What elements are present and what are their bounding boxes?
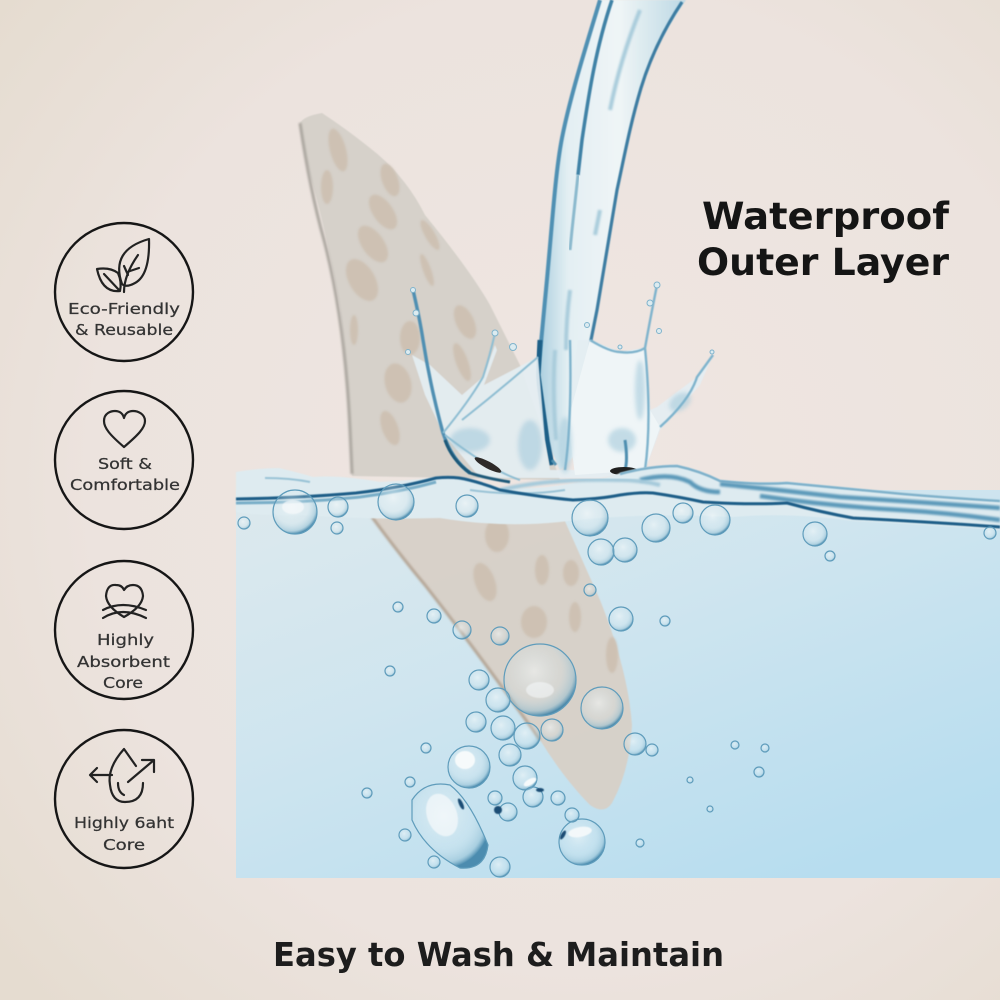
feature badge: Highly Absorbent Core: Absorbent <box>77 653 170 671</box>
bubble highlights <box>282 500 593 841</box>
heading: Waterproof Outer Layer: Outer Layer <box>697 241 950 284</box>
feature badge: Highly Bait Core <box>55 730 193 868</box>
bubble dark accents <box>457 788 567 840</box>
icon: absorbent heart <box>103 585 146 618</box>
pad print spots <box>321 127 618 673</box>
feature badge: Highly Absorbent Core: Core <box>103 674 143 692</box>
heading: Waterproof Outer Layer <box>697 195 950 284</box>
pouring water stream <box>538 0 686 470</box>
feature badge: Highly Bait Core: Core <box>103 836 145 854</box>
feature badge: Soft & Comfortable <box>55 391 193 529</box>
heading: Waterproof Outer Layer: Waterproof <box>702 195 950 238</box>
label: Highly <box>97 631 154 649</box>
water tank <box>236 490 1000 878</box>
feature badge: Soft & Comfortable: Comfortable <box>70 476 180 494</box>
feature badge: Eco-Friendly & Reusable: & Reusable <box>75 321 173 339</box>
splash shading <box>450 360 694 473</box>
footer caption: Easy to Wash & Maintain <box>273 935 724 974</box>
feature badge: Highly Absorbent Core <box>55 561 193 699</box>
label: Highly 6aht <box>74 814 174 832</box>
air bubbles <box>238 484 996 877</box>
icon: droplet with arrows <box>90 749 154 802</box>
splash crown <box>406 282 714 482</box>
label: Eco-Friendly <box>68 300 180 318</box>
icon: heart <box>104 411 145 447</box>
label: Soft & <box>98 455 152 473</box>
splash droplets <box>406 282 714 354</box>
icon: leaves <box>97 239 149 292</box>
diaper liner pad <box>300 113 632 810</box>
feature badge: Eco-Friendly & Reusable <box>55 223 193 361</box>
water surface band <box>236 465 1000 530</box>
